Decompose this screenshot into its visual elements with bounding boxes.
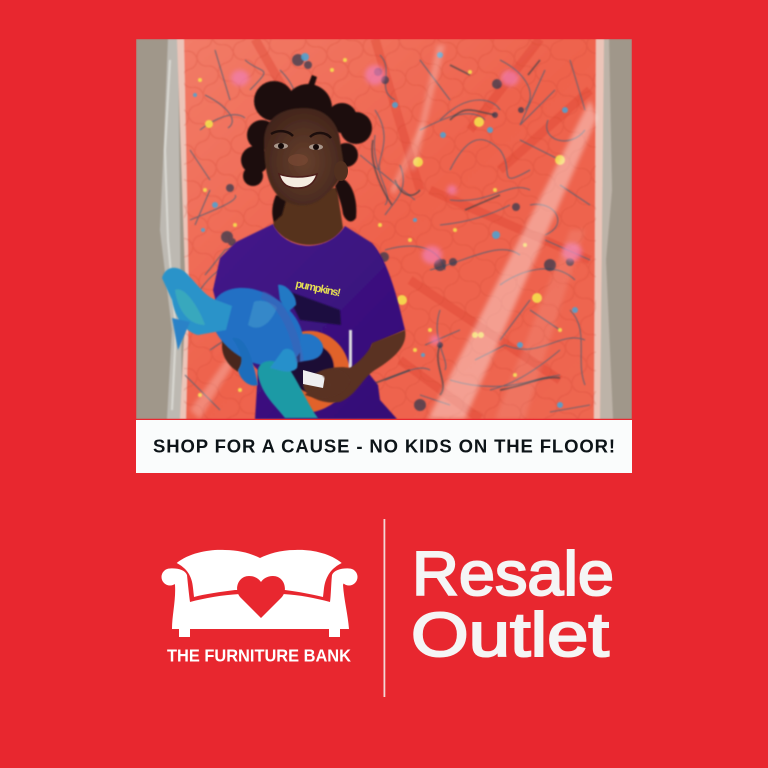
paint splatter xyxy=(185,50,590,412)
face xyxy=(264,108,344,205)
hair xyxy=(241,75,372,186)
shirt xyxy=(213,224,405,419)
plush dinosaur xyxy=(162,268,323,418)
divider line xyxy=(384,519,385,697)
Outlet: Outlet xyxy=(411,601,609,670)
eyebrows xyxy=(271,131,331,138)
icon: sofa with heart xyxy=(162,550,358,637)
eyes xyxy=(274,143,288,149)
shirt print xyxy=(290,292,353,413)
caption bar xyxy=(136,420,632,473)
logo: The Furniture Bank xyxy=(162,550,358,666)
nose xyxy=(288,154,308,166)
logo wordmark: THE FURNITURE BANK xyxy=(167,646,351,666)
Resale: Resale xyxy=(412,540,614,609)
icon: heart xyxy=(237,576,285,618)
shirt lettering: pumpkins! xyxy=(294,278,342,299)
tag in hand xyxy=(303,370,325,388)
ear xyxy=(336,162,348,181)
heading: Resale Outlet xyxy=(411,540,614,670)
caption text: SHOP FOR A CAUSE - NO KIDS ON THE FLOOR! xyxy=(153,436,615,456)
child xyxy=(162,75,405,419)
plastic wrap reflections xyxy=(190,45,597,419)
smile xyxy=(279,174,317,188)
neck xyxy=(273,188,343,245)
photo: child with plush dinosaur in front of painted mattress xyxy=(136,39,632,419)
braids xyxy=(272,178,356,222)
forearm and hand xyxy=(303,330,405,403)
